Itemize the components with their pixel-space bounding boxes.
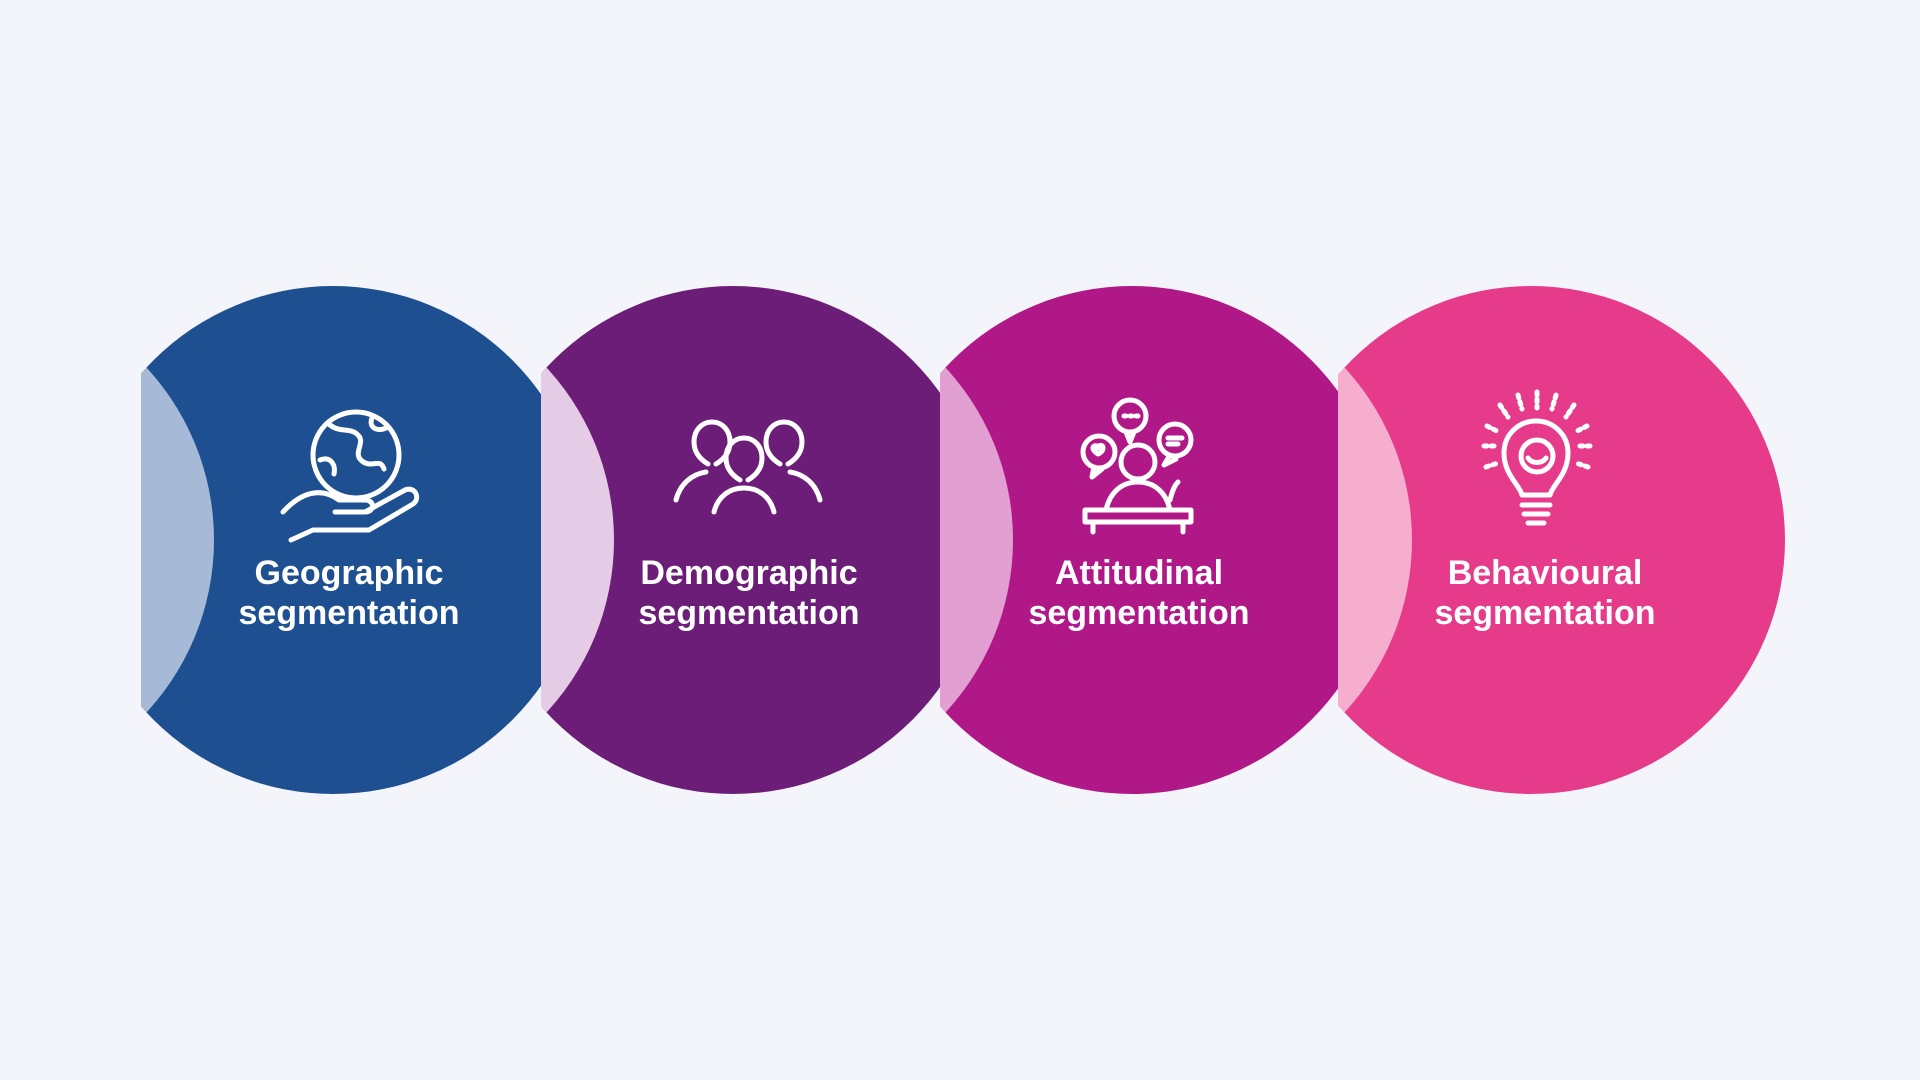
icon: smiling lightbulb xyxy=(1484,392,1590,523)
label: attitudinal xyxy=(1028,554,1250,632)
label: behavioural: Behavioural xyxy=(1448,554,1642,592)
icon: speaker with speech bubbles xyxy=(1083,400,1191,532)
icon: three people xyxy=(676,422,820,512)
label: geographic xyxy=(238,554,460,632)
label: geographic: Geographic xyxy=(255,554,443,592)
panel: demographic xyxy=(541,286,940,794)
label: behavioural xyxy=(1434,554,1656,632)
panel: geographic xyxy=(141,286,541,794)
panel: attitudinal xyxy=(940,286,1338,794)
icon: globe in hand xyxy=(283,412,417,540)
label: demographic xyxy=(638,554,860,632)
label: attitudinal: segmentation xyxy=(1028,594,1250,632)
label: attitudinal: Attitudinal xyxy=(1055,554,1223,592)
label: demographic: segmentation xyxy=(638,594,860,632)
panel: behavioural xyxy=(1338,286,1785,794)
label: demographic: Demographic xyxy=(640,554,858,592)
label: behavioural: segmentation xyxy=(1434,594,1656,632)
label: geographic: segmentation xyxy=(238,594,460,632)
